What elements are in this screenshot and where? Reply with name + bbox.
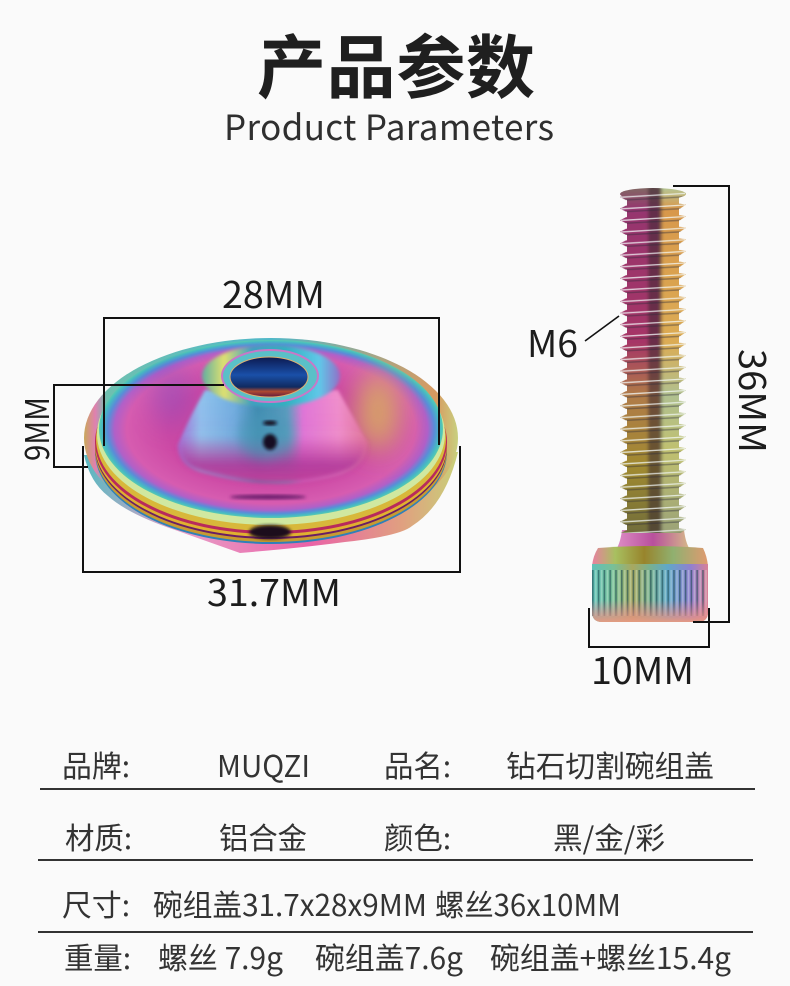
title: 产品参数: 产品参数 (257, 12, 535, 112)
row 1: brand label: 品牌: (62, 742, 130, 786)
cap raised boss (178, 390, 367, 483)
dimension bracket: 10MM (589, 608, 709, 647)
label: 9MM: 9MM (11, 397, 59, 461)
row 2 divider (38, 859, 753, 861)
bolt head bottom edge (592, 600, 708, 622)
cap striped side band (95, 343, 447, 544)
cool reflection (154, 365, 190, 425)
row 3: bolt size: 螺丝36x10MM (435, 881, 621, 925)
label: 28MM: 28MM (222, 265, 325, 319)
row 3: cap size: 碗组盖31.7x28x9MM (153, 881, 427, 925)
row 4: weight label: 重量: (64, 934, 131, 978)
row 1: brand value: MUQZI (217, 742, 310, 786)
bolt thread colour body (620, 188, 686, 533)
cap outer disc (84, 338, 458, 538)
dimension bracket: 36MM (673, 186, 729, 622)
cap face lower shadow (230, 494, 306, 500)
cap top face (99, 340, 443, 518)
cap centre hole (230, 357, 308, 397)
row 2: colour label: 颜色: (384, 814, 451, 858)
bolt knurl ridges (592, 570, 708, 616)
label: 36MM: 36MM (728, 349, 782, 453)
boss dark spots (263, 434, 277, 450)
row 4: combined weight: 碗组盖+螺丝15.4g (490, 934, 731, 978)
bolt neck (614, 530, 692, 552)
bolt knurled head (592, 564, 708, 622)
label: 31.7MM: 31.7MM (207, 563, 341, 617)
row 4: cap weight: 碗组盖7.6g (315, 934, 463, 978)
row 2: material value: 铝合金 (219, 814, 307, 858)
label: M6: M6 (527, 314, 578, 368)
cap lower flange (84, 452, 458, 553)
row 3: size label: 尺寸: (62, 881, 130, 925)
warm reflection (356, 372, 400, 452)
product photo: rainbow headset cap (84, 338, 458, 553)
row 1 divider (40, 788, 755, 790)
spec table (38, 742, 755, 978)
bolt head top (592, 546, 708, 572)
row 1: name value: 钻石切割碗组盖 (506, 742, 714, 786)
row 2: material label: 材质: (65, 814, 132, 858)
cap collar inner ring (222, 350, 318, 402)
subtitle: Product Parameters: Product Parameters (224, 100, 554, 151)
row 2: colour value: 黑/金/彩 (553, 814, 665, 858)
leader line: M6 (585, 316, 619, 341)
dimension bracket: 9MM (54, 385, 224, 467)
cap face reflections (154, 365, 400, 452)
product photo: rainbow bolt (592, 180, 708, 622)
dimension bracket: 31.7MM (83, 446, 460, 572)
dimension bracket: 28MM (104, 318, 439, 446)
cap band dark reflection (249, 525, 291, 539)
boss chrome reflection (239, 411, 291, 459)
row 4: bolt weight: 螺丝 7.9g (158, 934, 283, 978)
cap collar ring (202, 345, 340, 407)
row 1: name label: 品名: (384, 742, 451, 786)
label: 10MM: 10MM (591, 641, 694, 695)
row 3 divider (38, 931, 753, 933)
